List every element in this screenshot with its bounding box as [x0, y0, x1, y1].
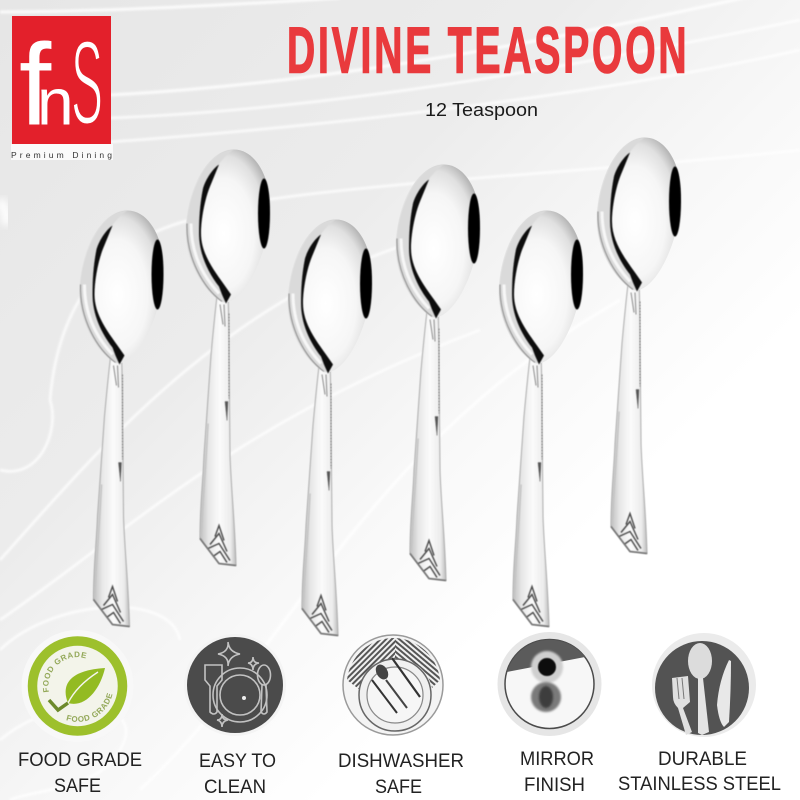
label: food grade safe	[18, 749, 142, 797]
logo: FnS Premium Dining: f	[19, 20, 52, 150]
icon: food grade safe: FOOD GRADE	[66, 693, 112, 722]
label: durable stainless steel	[618, 748, 781, 795]
label: dishwasher safe	[338, 750, 464, 798]
spoon 5	[499, 210, 583, 626]
subtitle: 12 Teaspoon	[425, 99, 538, 120]
spoons group	[80, 138, 681, 636]
title: DIVINE TEASPOON	[287, 14, 687, 87]
spoon 1	[80, 210, 164, 626]
icon: durable stainless steel	[652, 633, 756, 737]
spoon 4	[396, 164, 480, 580]
label: easy to clean: CLEAN	[204, 776, 266, 798]
label: easy to clean: EASY TO	[199, 750, 276, 772]
spoon 2	[186, 150, 270, 566]
label: mirror finish	[520, 748, 594, 796]
spoon 3	[288, 220, 372, 636]
icon: dishwasher safe	[343, 635, 443, 735]
label: food grade safe: SAFE	[54, 775, 101, 797]
label: durable stainless steel: STAINLESS STEEL	[618, 773, 781, 795]
icon: food grade safe: FOOD GRADE	[42, 652, 86, 692]
label: food grade safe: FOOD GRADE	[18, 749, 142, 771]
label: mirror finish: MIRROR	[520, 748, 594, 770]
spoon 6	[597, 138, 681, 554]
icon: mirror finish	[498, 632, 602, 736]
icon: easy to clean	[184, 634, 286, 736]
label: easy to clean	[199, 750, 276, 798]
logo: FnS Premium Dining	[11, 16, 113, 160]
icon: food grade safe	[28, 636, 128, 736]
logo: FnS Premium Dining: n	[37, 64, 74, 138]
label: dishwasher safe: SAFE	[375, 776, 422, 798]
logo: FnS Premium Dining: S	[71, 16, 103, 150]
label: durable stainless steel: DURABLE	[658, 748, 747, 770]
label: dishwasher safe: DISHWASHER	[338, 750, 464, 772]
logo: FnS Premium Dining: Premium Dining	[11, 150, 112, 160]
label: mirror finish: FINISH	[524, 774, 585, 796]
